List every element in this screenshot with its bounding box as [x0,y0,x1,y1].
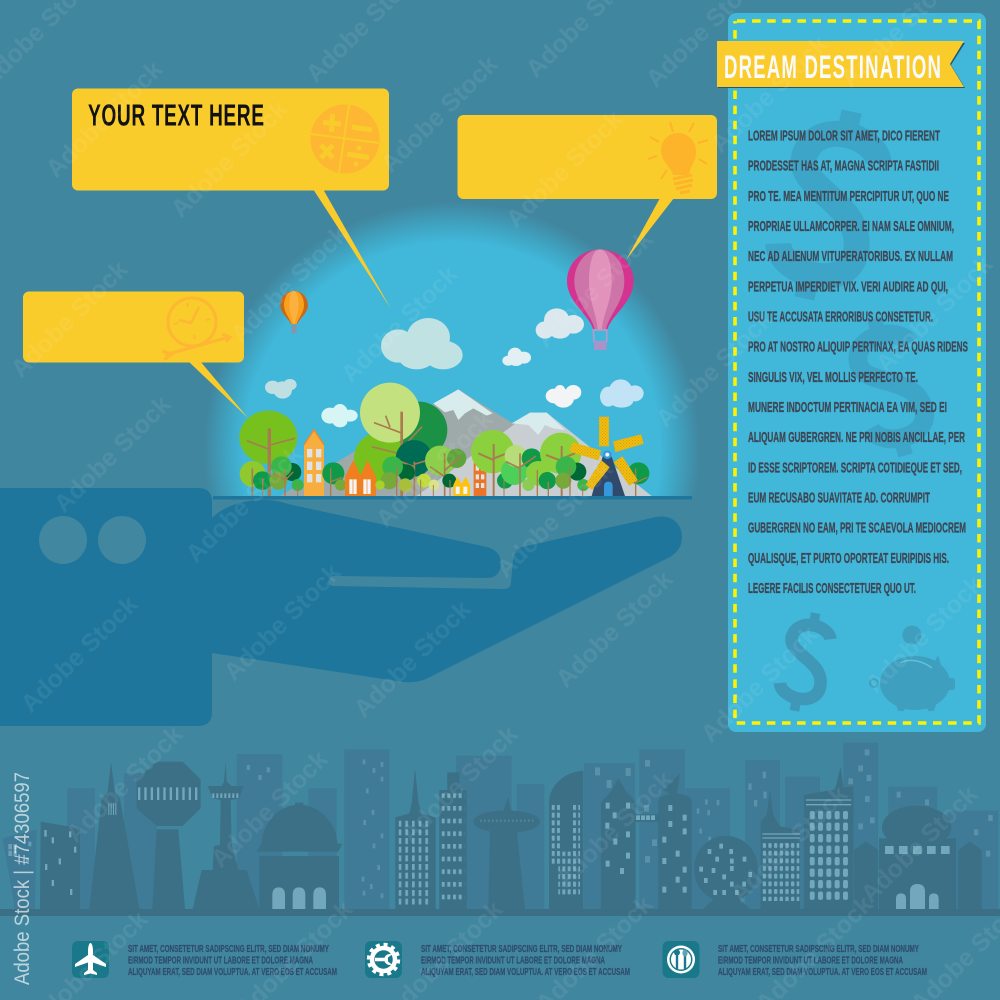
footer text two: SIT AMET, CONSETETUR SADIPSCING ELITR, SED DIAM NONUMY [421,944,622,955]
large cloud [381,318,463,369]
stock watermarks: Adobe Stock [650,305,778,433]
small tree cluster [240,456,304,496]
observation tower [193,762,259,909]
observation tower windows [212,793,238,798]
front trees of the large group [375,440,439,496]
narrow orange house [474,453,486,496]
stock watermarks: Adobe Stock [205,745,333,873]
icon: dollar sign bottom [776,609,834,715]
footer text three [718,944,927,978]
rear towers [67,749,500,909]
footer text two [421,944,630,978]
footer text one: EIRMOD TEMPOR INVIDUNT UT LABORE ET DOLORE MAGNA [128,955,313,966]
tower [592,457,625,496]
domed hall [257,803,342,909]
skyline left half [3,749,500,909]
trees right [471,430,589,496]
left white cloud [321,404,358,427]
ribbon [717,41,964,87]
icon: gear and wrench [365,941,402,978]
callout: your text here [72,88,391,309]
front mountain [417,413,652,496]
saucer window lines [480,818,533,824]
footer text one: SIT AMET, CONSETETUR SADIPSCING ELITR, SED DIAM NONUMY [128,944,329,955]
rear mountain [280,389,630,496]
sky dome glow [210,208,694,496]
tall dotted tower [804,767,853,909]
panel body text [748,128,968,597]
slanted building [3,829,37,909]
stock watermarks: Adobe Stock [550,765,678,893]
arched building [549,771,583,909]
stock id label: Adobe Stock | #74306597 [11,772,34,985]
footer text one: ALIQUYAM ERAT, SED DIAM VOLUPTUA. AT VERO EOS ET ACCUSAM [128,967,337,978]
rear tower windows [247,759,383,898]
icon: plate and cutlery [662,941,700,978]
spired tower [395,768,436,909]
icon: light bulb [648,122,708,193]
callout box [458,115,717,199]
tall dotted tower roof lines [806,800,851,805]
windmill [570,417,643,496]
stock watermarks: Adobe Stock [500,105,628,233]
ground strip [0,909,1000,916]
stock watermarks: Adobe Stock [725,780,853,908]
footer text two: ALIQUYAM ERAT, SED DIAM VOLUPTUA. AT VERO EOS ET ACCUSAM [421,967,630,978]
front snow cap [512,413,565,435]
callout box [23,292,244,362]
city skyline [0,743,1000,916]
arched building windows [552,805,580,895]
dotted tower [761,790,800,909]
stock watermarks: Adobe Stock [348,595,476,723]
icon: piggy bank [870,626,955,711]
twin tower right with dish [658,773,692,909]
stock watermarks: Adobe Stock [855,780,983,908]
panel title: DREAM DESTINATION [724,49,941,85]
small cloud [502,348,531,366]
envelope [280,291,308,324]
tall dotted tower windows [810,811,848,900]
left pale cloud [265,379,297,399]
callout heading: YOUR TEXT HERE [88,99,264,133]
envelope [567,249,634,329]
ribbon shadow [718,43,965,88]
sphere building windows [699,844,752,895]
large tree group [354,383,447,496]
pyramid tower [89,762,139,909]
branches [372,416,422,454]
office building windows [44,830,76,895]
mountains [280,389,652,496]
large green tree [239,411,297,496]
stock watermarks: Adobe Stock [695,620,823,748]
panel background [728,13,986,732]
small yellow house [453,477,470,496]
upper right cloud [536,308,584,339]
icon: dollar sign middle [843,312,937,462]
cuff button left [39,516,87,564]
basket [593,330,607,342]
tall yellow house [304,430,324,496]
slanted building windows [8,842,31,862]
water tower window band [138,787,197,800]
sleeve [0,488,212,726]
tree far right [627,462,649,496]
bright green tree [354,432,406,484]
domed hall arches [272,887,326,909]
pyramid tower window grille [108,803,116,815]
stock watermarks: Adobe Stock [335,260,463,388]
stepped tower [439,772,467,909]
water tower pedestal [152,829,185,909]
twin tower left windows [605,803,630,874]
stock watermarks: Adobe Stock [860,570,988,698]
trees center [425,446,466,496]
basket [292,325,297,333]
stock watermarks: Adobe Stock [48,390,176,518]
large trunk [398,412,406,496]
orange twin house [345,460,376,496]
stock watermarks: Adobe Stock [870,250,998,378]
stock watermarks: Adobe Stock [705,30,833,158]
palace windows [885,846,950,909]
stock watermarks: Adobe Stock [530,225,658,353]
callout tail [188,361,248,418]
sky bridge [635,814,659,822]
stock watermarks: Adobe Stock [60,720,188,848]
callout: clock [23,292,248,418]
pink balloon [567,249,634,350]
stock watermarks: Adobe Stock [370,405,498,533]
stock watermarks: Adobe Stock [40,55,168,183]
tree beside house [322,462,346,496]
spired tower windows [399,821,432,905]
stock watermarks: Adobe Stock [15,590,143,718]
open palm [212,500,682,682]
office building [40,822,80,909]
icon: large dollar sign top [768,102,888,308]
blades [570,417,643,489]
stock watermarks: Adobe Stock [5,255,133,383]
landscape scene [239,249,652,496]
trees left [239,411,304,496]
palace [854,806,982,909]
stock watermarks: Adobe Stock [395,720,523,848]
door [604,482,613,496]
callout box [72,88,389,190]
twin tower right windows [662,805,687,893]
stock watermarks: Adobe Stock [218,558,346,686]
saucer tower [473,797,540,909]
hub [603,450,612,459]
sphere building [694,836,757,909]
octagon water tower [137,762,201,826]
dotted tower roof lines [762,834,800,838]
panel: dream destination [717,13,986,732]
callout tail [626,198,674,260]
callout: idea [458,115,717,260]
white cloud [546,385,581,408]
stepped tower windows [442,793,464,900]
footer [72,941,927,978]
stock watermarks: Adobe Stock [180,440,308,568]
pale green tree [360,383,420,443]
icon: clock with arrow [162,298,230,360]
callout tail [313,189,391,309]
stock watermarks: Adobe Stock [165,95,293,223]
stock watermarks: Adobe Stock [225,220,353,348]
clouds [265,308,644,427]
skyline right half [473,743,998,909]
stock watermarks: Adobe Stock [550,565,678,693]
stock watermarks: Adobe Stock [490,455,618,583]
stock watermarks: Adobe Stock [375,50,503,178]
ground line [213,496,692,500]
rear tower windows [595,749,993,863]
icon: airplane [72,941,109,978]
right blue cloud [600,379,644,408]
hand holding the scene [0,488,682,726]
twin tower left [601,778,636,909]
cuff button right [98,516,146,564]
icon: math symbols [310,104,380,174]
rear snow cap [433,389,493,420]
sky bridge windows [636,815,655,820]
footer text two: EIRMOD TEMPOR INVIDUNT UT LABORE ET DOLORE MAGNA [421,955,605,966]
rear towers [500,743,998,909]
footer text one [128,944,337,978]
dashed border [735,21,979,723]
dotted tower windows [763,843,799,901]
dark back tree [391,402,447,458]
small orange balloon [280,291,308,333]
